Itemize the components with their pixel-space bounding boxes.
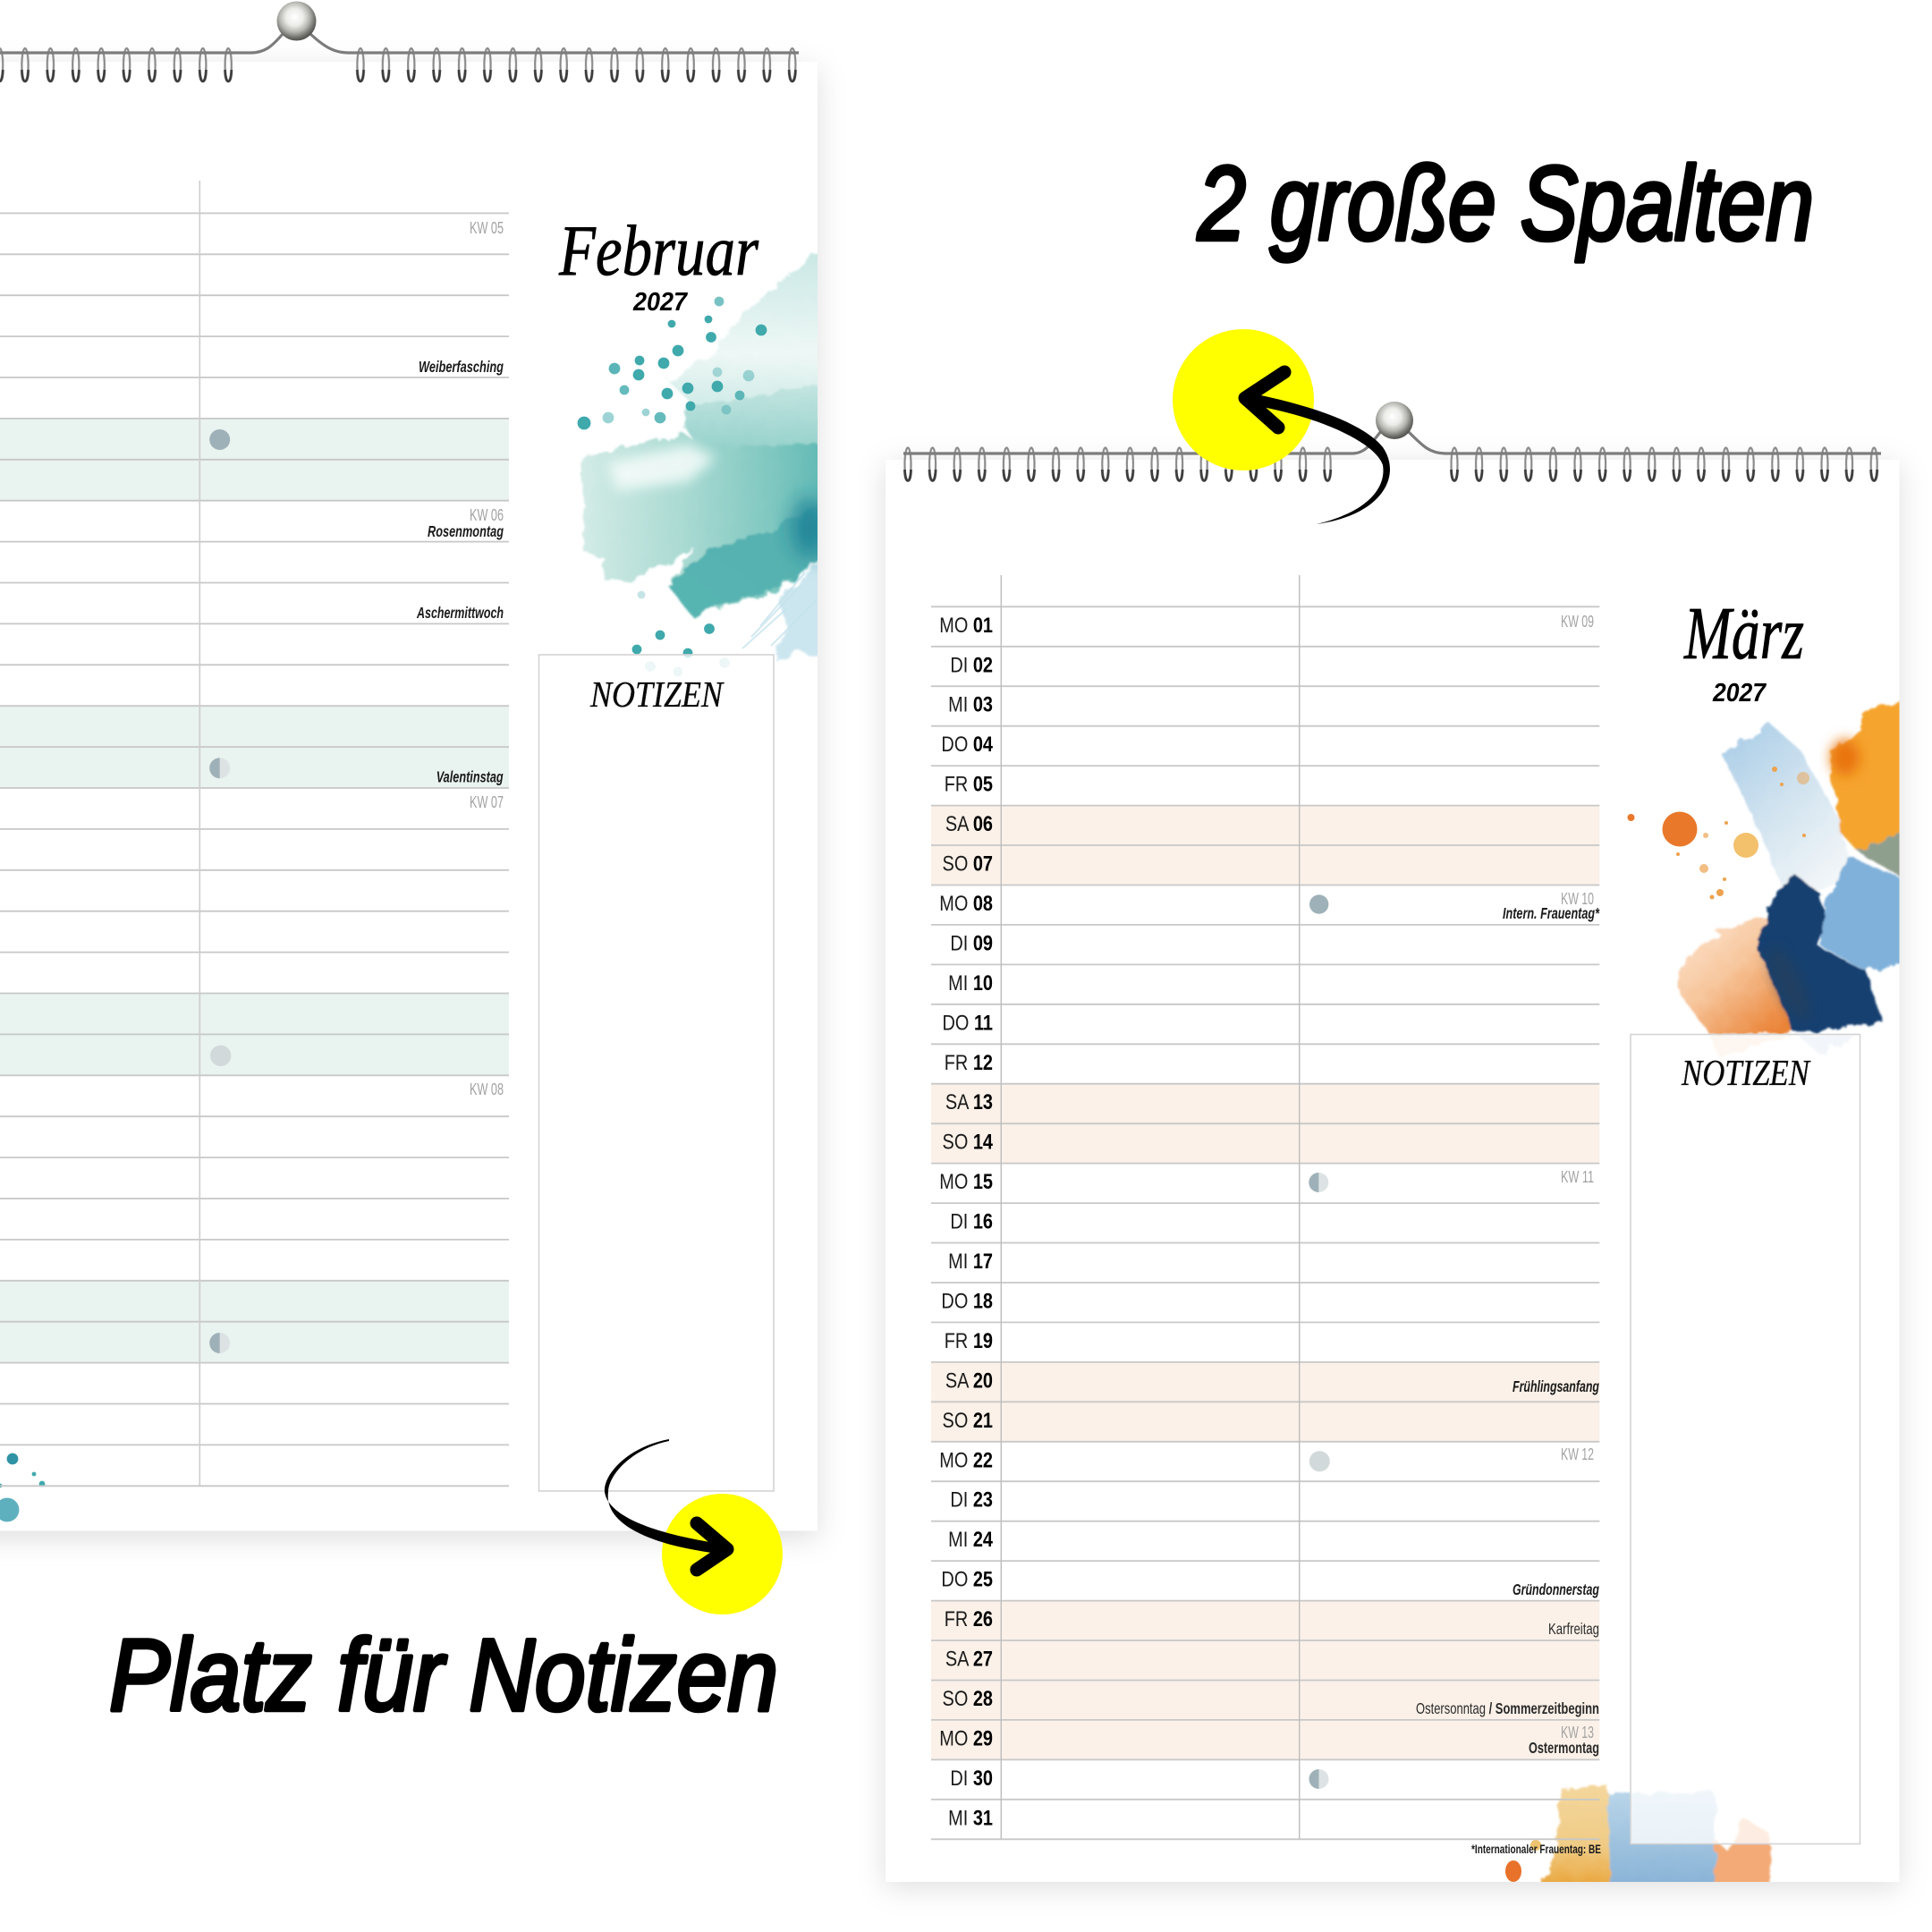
moon phase: new: [1309, 1451, 1330, 1471]
holiday: Ostermontag: Ostermontag: [1529, 1739, 1599, 1757]
day labels: SO 07: [943, 852, 993, 876]
page sheet: February: [0, 62, 818, 1531]
watercolor strokes bottom: [1505, 1785, 1770, 1887]
week number KW 09: KW 09: [1561, 612, 1594, 631]
page sheet: March: [886, 460, 1900, 1882]
notes heading: March: NOTIZEN: [1681, 1052, 1811, 1093]
moon phase: full: [1309, 894, 1328, 914]
moon phase: half: [209, 1333, 230, 1353]
day labels: DO 11: [943, 1011, 993, 1035]
day labels: MI 17: [948, 1249, 993, 1273]
day labels: FR 19: [945, 1328, 993, 1352]
day labels: DI 30: [950, 1766, 993, 1790]
holiday: Ostersonntag / Sommerzeitbeginn: Ostersonntag / Sommerzeitbeginn: [1416, 1699, 1599, 1717]
day labels: [939, 613, 994, 1830]
day labels: SA 27: [945, 1647, 993, 1671]
day labels: SO 14: [943, 1130, 994, 1154]
weekend shading rows: [931, 806, 1599, 1759]
weekend shading rows: [0, 419, 509, 1363]
arrow: pointing to columns: [1245, 372, 1390, 524]
month title: Februar: Februar: [558, 212, 759, 291]
week number KW 12: KW 12: [1561, 1445, 1594, 1463]
moon phase: full: [209, 429, 230, 450]
week number KW 10: KW 10: [1561, 889, 1594, 908]
day labels: FR 26: [945, 1606, 993, 1631]
watercolor splashes: [1628, 767, 1809, 900]
day labels: FR 12: [945, 1050, 993, 1074]
highlight: yellow circle bottom: [662, 1494, 783, 1614]
holiday: Weiberfasching: Weiberfasching: [419, 358, 504, 376]
day labels: MO 29: [939, 1726, 993, 1750]
week number KW 05: KW 05: [470, 218, 504, 237]
week number KW 08: KW 08: [470, 1080, 504, 1098]
notes heading: February: NOTIZEN: [589, 674, 724, 715]
holiday: Aschermittwoch: Aschermittwoch: [416, 604, 504, 622]
spiral binding: February: [0, 2, 800, 86]
day labels: DO 18: [941, 1289, 993, 1313]
notes box: March: [1631, 1034, 1860, 1844]
moon phase: half: [209, 758, 230, 778]
moon phase: half: [1309, 1769, 1329, 1789]
day labels: MI 03: [948, 692, 993, 716]
holiday: Valentinstag: Valentinstag: [436, 767, 504, 785]
calendar grid: [0, 181, 509, 1486]
day labels: SA 06: [945, 811, 993, 836]
spiral binding: March: [894, 402, 1887, 486]
footnote: *Internationaler Frauentag: BE: [1471, 1842, 1601, 1856]
day labels: MO 22: [939, 1448, 993, 1472]
day labels: DI 09: [950, 931, 993, 955]
day labels: FR 05: [945, 772, 993, 796]
highlight: yellow circle top: [1173, 329, 1314, 470]
day labels: SO 28: [943, 1686, 993, 1710]
day labels: DI 23: [950, 1487, 993, 1512]
calendar grid: [931, 575, 1599, 1839]
holiday: Karfreitag: Karfreitag: [1548, 1620, 1599, 1638]
heading: 2 große Spalten: 2 große Spalten: [1197, 145, 1814, 263]
day labels: MI 31: [948, 1806, 993, 1830]
panel: March calendar page: [886, 402, 1907, 1887]
teal watercolor dots: [0, 297, 767, 1521]
heading: Platz für Notizen: Platz für Notizen: [109, 1619, 778, 1733]
day labels: DI 16: [950, 1209, 993, 1233]
day labels: DI 02: [950, 653, 993, 677]
holiday: Frühlingsanfang: Frühlingsanfang: [1513, 1377, 1599, 1395]
day labels: MO 08: [939, 891, 993, 915]
year: 2027: 2027: [1712, 679, 1767, 708]
month title: März: März: [1683, 592, 1804, 675]
watercolor artwork: March: [1680, 699, 1907, 1057]
notes box: February: [538, 655, 774, 1491]
week number KW 13: KW 13: [1561, 1723, 1594, 1741]
day labels: MO 15: [939, 1169, 993, 1194]
holiday: Gründonnerstag: Gründonnerstag: [1513, 1580, 1599, 1598]
moon phase: half: [1309, 1173, 1328, 1192]
year: 2027: 2027: [632, 288, 689, 317]
week number KW 06: KW 06: [470, 505, 504, 524]
moon phase: new: [210, 1046, 231, 1066]
day labels: MI 10: [948, 970, 993, 995]
day labels: DO 25: [941, 1567, 993, 1591]
day labels: SO 21: [943, 1408, 993, 1432]
week number KW 07: KW 07: [470, 792, 504, 811]
panel: February calendar page: [0, 2, 827, 1531]
teal watercolor artwork: [581, 250, 827, 660]
holiday: Rosenmontag: Rosenmontag: [428, 522, 504, 540]
day labels: MI 24: [948, 1527, 994, 1552]
day labels: SA 13: [945, 1089, 993, 1114]
week number KW 11: KW 11: [1561, 1167, 1594, 1186]
day labels: SA 20: [945, 1368, 993, 1393]
arrow: pointing to notes: [605, 1439, 727, 1570]
day labels: DO 04: [941, 732, 994, 757]
day labels: MO 01: [939, 613, 993, 637]
holiday: Intern. Frauentag: Intern. Frauentag*: [1503, 904, 1600, 922]
